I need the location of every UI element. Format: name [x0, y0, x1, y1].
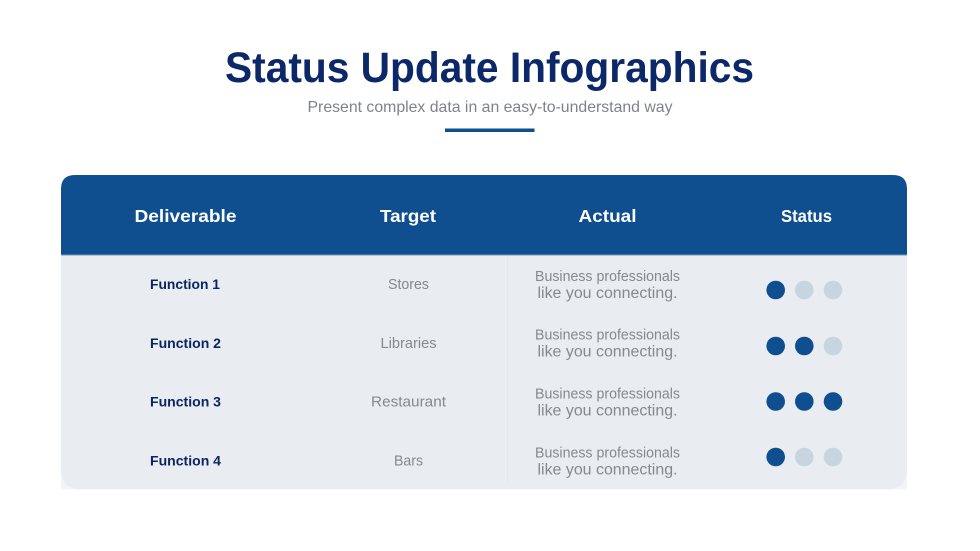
- actual: like you connecting.: [538, 462, 678, 478]
- row: Function 2: [150, 328, 842, 360]
- target: Stores: [388, 276, 429, 293]
- actual: [535, 386, 680, 420]
- actual: [535, 446, 680, 478]
- table header: [61, 175, 907, 256]
- target: Libraries: [380, 335, 436, 352]
- deliverable: Function 2: [150, 335, 221, 351]
- header: Target: Target: [380, 206, 436, 226]
- target: Restaurant: [371, 394, 447, 410]
- row: Function 3: [150, 386, 842, 420]
- actual: [535, 269, 680, 302]
- actual: Business professionals: [535, 446, 680, 462]
- subtitle: Present complex data in an easy-to-understand way: [308, 99, 672, 116]
- row: Function 4: [150, 446, 842, 478]
- title underline: [445, 128, 534, 132]
- deliverable: Function 1: [150, 276, 220, 292]
- table body: [61, 250, 907, 490]
- actual: like you connecting.: [538, 402, 678, 420]
- header: Status: Status: [781, 206, 832, 226]
- header: Actual: Actual: [578, 206, 636, 226]
- status dots: [766, 392, 842, 411]
- header: Deliverable: Deliverable: [134, 206, 237, 226]
- deliverable: Function 4: [150, 452, 221, 468]
- actual: like you connecting.: [538, 285, 678, 302]
- panel: status table: [61, 175, 907, 490]
- target: Bars: [394, 452, 423, 470]
- actual: Business professionals: [535, 269, 680, 285]
- status dots: [766, 448, 842, 466]
- actual: like you connecting.: [538, 344, 678, 360]
- actual: Business professionals: [535, 386, 680, 402]
- deliverable: Function 3: [150, 394, 221, 410]
- title: Status Update Infographics: [225, 45, 754, 92]
- actual: [535, 328, 680, 360]
- row: Function 1: [150, 269, 842, 302]
- actual: Business professionals: [535, 328, 680, 344]
- status dots: [766, 281, 842, 299]
- status dots: [766, 337, 842, 355]
